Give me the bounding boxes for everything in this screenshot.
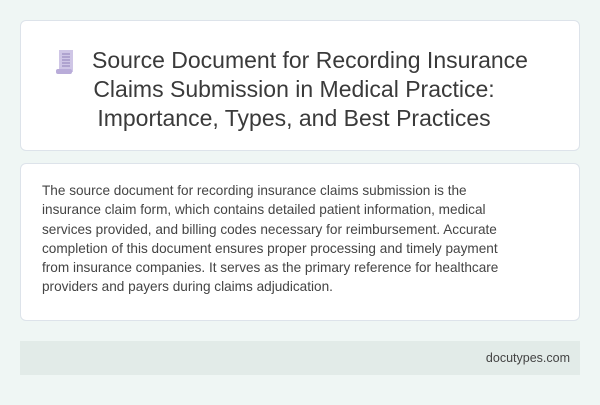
text block: description: completion of this document ensures proper processing and timely payment xyxy=(42,241,498,256)
title: Source Document for Recording Insurance xyxy=(92,47,528,73)
footer text: source: docutypes.com xyxy=(486,351,570,365)
text block: description: providers and payers during claims adjudication. xyxy=(42,279,333,294)
text block: description: insurance claim form, which contains detailed patient information, medical xyxy=(42,202,486,217)
footer bar xyxy=(20,341,580,375)
panel: title card xyxy=(20,20,580,151)
panel: description card xyxy=(20,163,580,321)
text block: description: The source document for recording insurance claims submission is the xyxy=(42,183,467,198)
title: Importance, Types, and Best Practices xyxy=(97,105,491,131)
icon: document xyxy=(56,50,73,74)
title: Claims Submission in Medical Practice: xyxy=(93,76,495,102)
text block: description: services provided, and billing codes necessary for reimbursement. Accurate xyxy=(42,222,497,237)
text block: description xyxy=(42,183,498,294)
title xyxy=(92,47,528,131)
text block: description: from insurance companies. It serves as the primary reference for healthcare xyxy=(42,260,498,275)
